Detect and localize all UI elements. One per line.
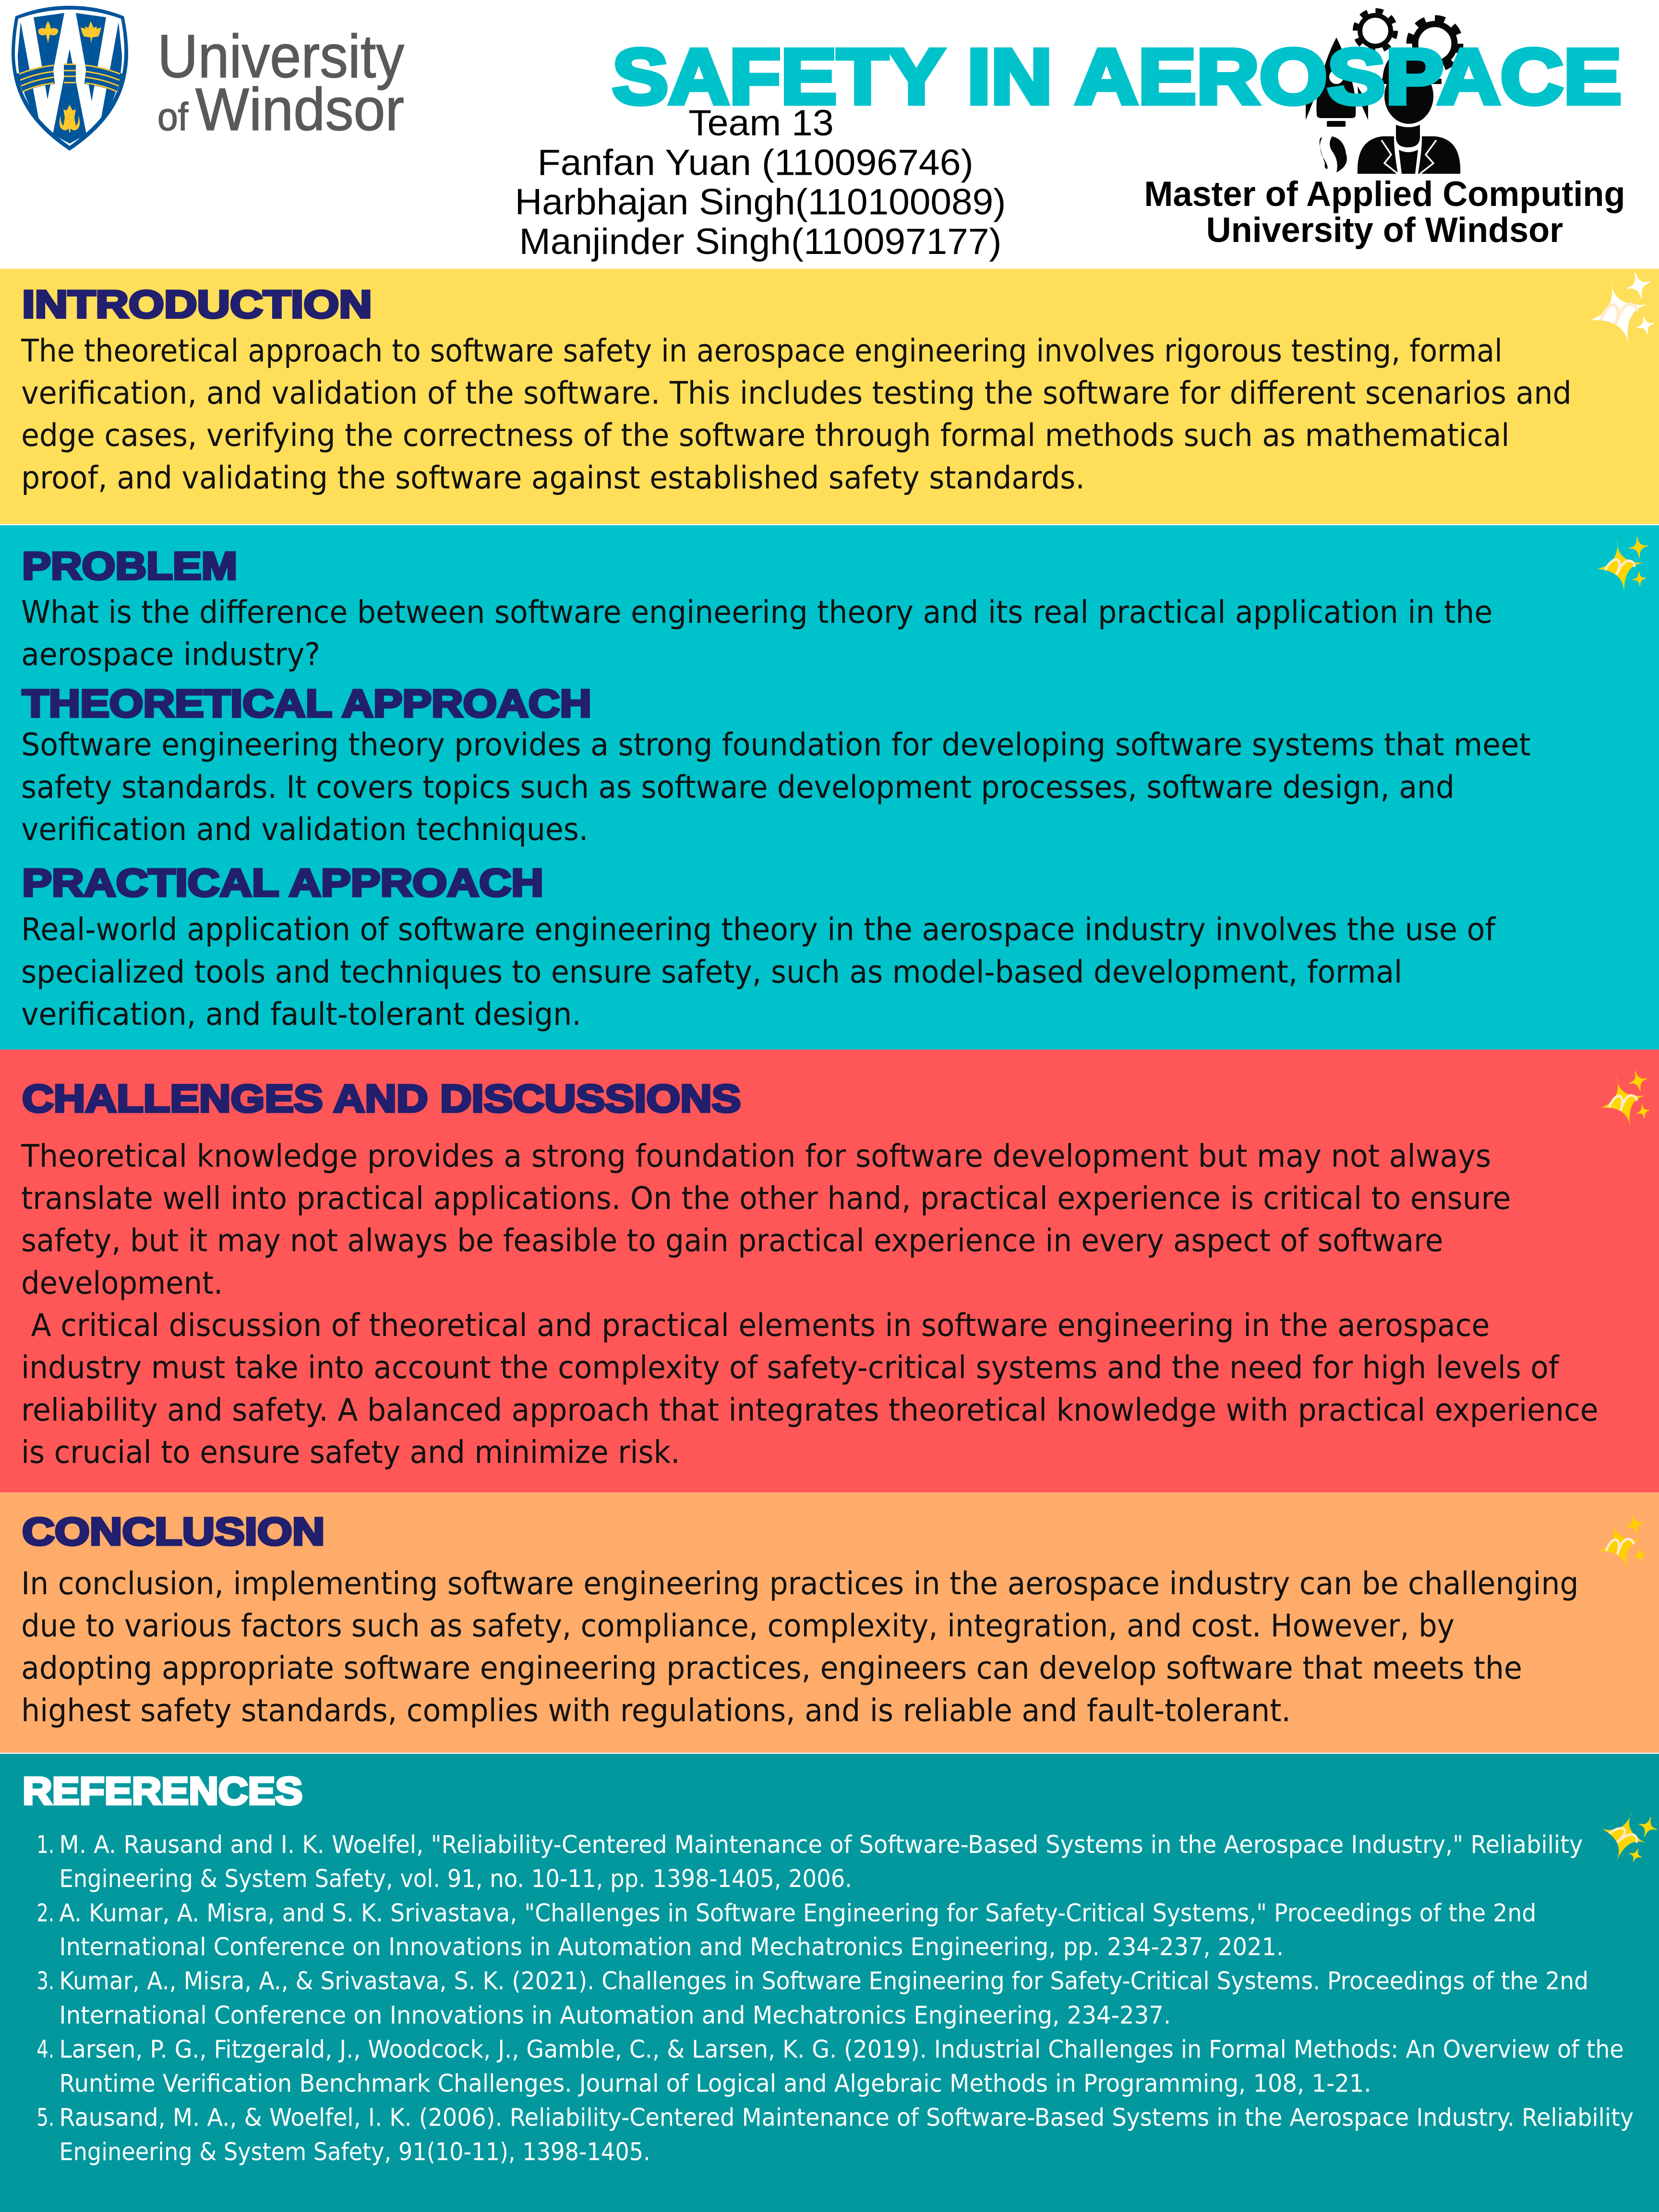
title: AEROSPACE xyxy=(1075,33,1622,120)
text: reference list: M. A. Rausand and I. K. Woelfel, "Reliability-Centered Maintenance of Software-Based Systems in the Aerospace Industry," Reliability xyxy=(59,1830,1583,1859)
team names: Team 13 xyxy=(688,103,834,144)
logo wordmark: Windsor xyxy=(195,76,404,143)
text: challenges body xyxy=(21,1138,1599,1471)
text: introduction body: proof, and validating the software against established safety standards. xyxy=(21,460,1085,496)
icon: right gear xyxy=(1409,18,1460,69)
team names: Fanfan Yuan (110096746) xyxy=(538,142,974,183)
text: problem body: What is the difference between software engineering theory and its real practical application in the xyxy=(21,594,1492,630)
logo wordmark xyxy=(157,22,404,143)
panel: introduction xyxy=(0,269,1659,524)
text: conclusion body: highest safety standards, complies with regulations, and is reliable and fault-tolerant. xyxy=(21,1693,1291,1729)
text: practical body xyxy=(21,912,1496,1033)
team names: Manjinder Singh(110097177) xyxy=(519,221,1002,262)
text: reference list: Engineering & System Safety, vol. 91, no. 10-11, pp. 1398-1405, 2006. xyxy=(59,1864,852,1893)
programme label xyxy=(1144,174,1625,250)
icon: shield crest xyxy=(12,6,128,151)
panel: conclusion xyxy=(0,1492,1659,1753)
title: SAFETY xyxy=(612,33,945,120)
text: reference list: International Conference on Innovations in Automation and Mechatronics Engineering, pp. 234-237, 2021. xyxy=(59,1933,1284,1961)
text: challenges body: safety, but it may not always be feasible to gain practical experience in every aspect of software xyxy=(21,1223,1443,1259)
programme label: University of Windsor xyxy=(1206,210,1563,250)
heading: conclusion: CONCLUSION xyxy=(22,1510,325,1553)
heading: problem: PROBLEM xyxy=(22,545,237,588)
header xyxy=(12,6,1625,262)
text: challenges body: Theoretical knowledge provides a strong foundation for software development but may not always xyxy=(21,1138,1491,1174)
text: practical body: Real-world application of software engineering theory in the aerospace industry involves the use of xyxy=(21,912,1496,948)
team names xyxy=(515,103,1006,262)
text: reference list: Engineering & System Safety, 91(10-11), 1398-1405. xyxy=(59,2138,650,2166)
text: reference list: A. Kumar, A. Misra, and S. K. Srivastava, "Challenges in Software Engineering for Safety-Critical Systems," Proceedings of the 2nd xyxy=(59,1899,1536,1927)
title xyxy=(612,33,1622,120)
icon: sparkle gold xyxy=(1597,1070,1653,1130)
heading: practical approach: PRACTICAL APPROACH xyxy=(22,861,543,904)
icon: engineer with gears and rocket xyxy=(1306,11,1460,174)
text: reference list: Kumar, A., Misra, A., & Srivastava, S. K. (2021). Challenges in Software Engineering for Safety-Critical Systems. Proceedings of the 2nd xyxy=(59,1967,1588,1995)
text: reference list: 1. xyxy=(36,1830,54,1859)
logo wordmark: University xyxy=(157,22,404,90)
text: theoretical body: safety standards. It covers topics such as software development processes, software design, and xyxy=(21,769,1455,805)
panel: challenges and discussions xyxy=(0,1049,1659,1492)
text: conclusion body: adopting appropriate software engineering practices, engineers can develop software that meets the xyxy=(21,1650,1522,1686)
text: challenges body: industry must take into account the complexity of safety-critical systems and the need for high levels of xyxy=(21,1350,1560,1386)
text: theoretical body xyxy=(21,727,1531,848)
logo wordmark: of xyxy=(157,95,188,139)
text: theoretical body: Software engineering theory provides a strong foundation for developing software systems that meet xyxy=(21,727,1531,763)
text: reference list: International Conference on Innovations in Automation and Mechatronics Engineering, 234-237. xyxy=(59,2001,1171,2029)
text: reference list: Runtime Verification Benchmark Challenges. Journal of Logical and Algebraic Methods in Programming, 108, 1-21. xyxy=(59,2069,1371,2098)
text: problem body xyxy=(21,594,1492,673)
logo: University of Windsor xyxy=(12,6,404,151)
icon: left gear xyxy=(1355,11,1395,51)
text: conclusion body: due to various factors such as safety, compliance, complexity, integration, and cost. However, by xyxy=(21,1608,1455,1644)
icon: person xyxy=(1358,50,1460,174)
text: introduction body: verification, and validation of the software. This includes testing the software for different scenarios and xyxy=(21,375,1572,411)
programme label: Master of Applied Computing xyxy=(1144,174,1625,214)
text: reference list xyxy=(36,1830,1634,2166)
text: practical body: verification, and fault-tolerant design. xyxy=(21,997,581,1033)
text: reference list: 2. xyxy=(36,1899,54,1927)
text: problem body: aerospace industry? xyxy=(21,637,320,673)
icon: sparkle gold xyxy=(1593,1514,1650,1574)
text: introduction body: edge cases, verifying the correctness of the software through formal methods such as mathematical xyxy=(21,418,1509,454)
text: theoretical body: verification and validation techniques. xyxy=(21,812,588,848)
text: challenges body: development. xyxy=(21,1265,223,1301)
text: challenges body: is crucial to ensure safety and minimize risk. xyxy=(21,1435,680,1471)
panel: problem and approaches xyxy=(0,525,1659,1049)
text: challenges body: A critical discussion of theoretical and practical elements in software engineering in the aerospace xyxy=(31,1308,1490,1344)
icon: sparkle gold xyxy=(1597,537,1648,593)
text: conclusion body xyxy=(21,1566,1578,1729)
text: conclusion body: In conclusion, implementing software engineering practices in the aerospace industry can be challenging xyxy=(21,1566,1578,1602)
panel: references xyxy=(0,1754,1659,2212)
icon: rocket xyxy=(1306,37,1368,172)
heading: introduction: INTRODUCTION xyxy=(22,283,372,326)
text: introduction body: The theoretical approach to software safety in aerospace engineering involves rigorous testing, formal xyxy=(21,333,1503,369)
heading: challenges and discussions: CHALLENGES AND DISCUSSIONS xyxy=(22,1077,741,1120)
title: IN xyxy=(967,33,1052,120)
text: challenges body: translate well into practical applications. On the other hand, practical experience is critical to ensure xyxy=(21,1181,1511,1217)
text: reference list: 4. xyxy=(36,2035,54,2063)
text: challenges body: reliability and safety. A balanced approach that integrates theoretical knowledge with practical experience xyxy=(21,1392,1599,1428)
heading: references: REFERENCES xyxy=(23,1770,302,1813)
icon: sparkle gold xyxy=(1593,1801,1659,1871)
icon: sparkle white xyxy=(1585,271,1659,350)
text: reference list: 3. xyxy=(36,1967,54,1995)
text: practical body: specialized tools and techniques to ensure safety, such as model-based development, formal xyxy=(21,954,1402,990)
heading: theoretical approach: THEORETICAL APPROACH xyxy=(22,682,591,725)
text: reference list: 5. xyxy=(36,2104,54,2132)
team names: Harbhajan Singh(110100089) xyxy=(515,182,1006,223)
text: introduction body xyxy=(21,333,1572,496)
